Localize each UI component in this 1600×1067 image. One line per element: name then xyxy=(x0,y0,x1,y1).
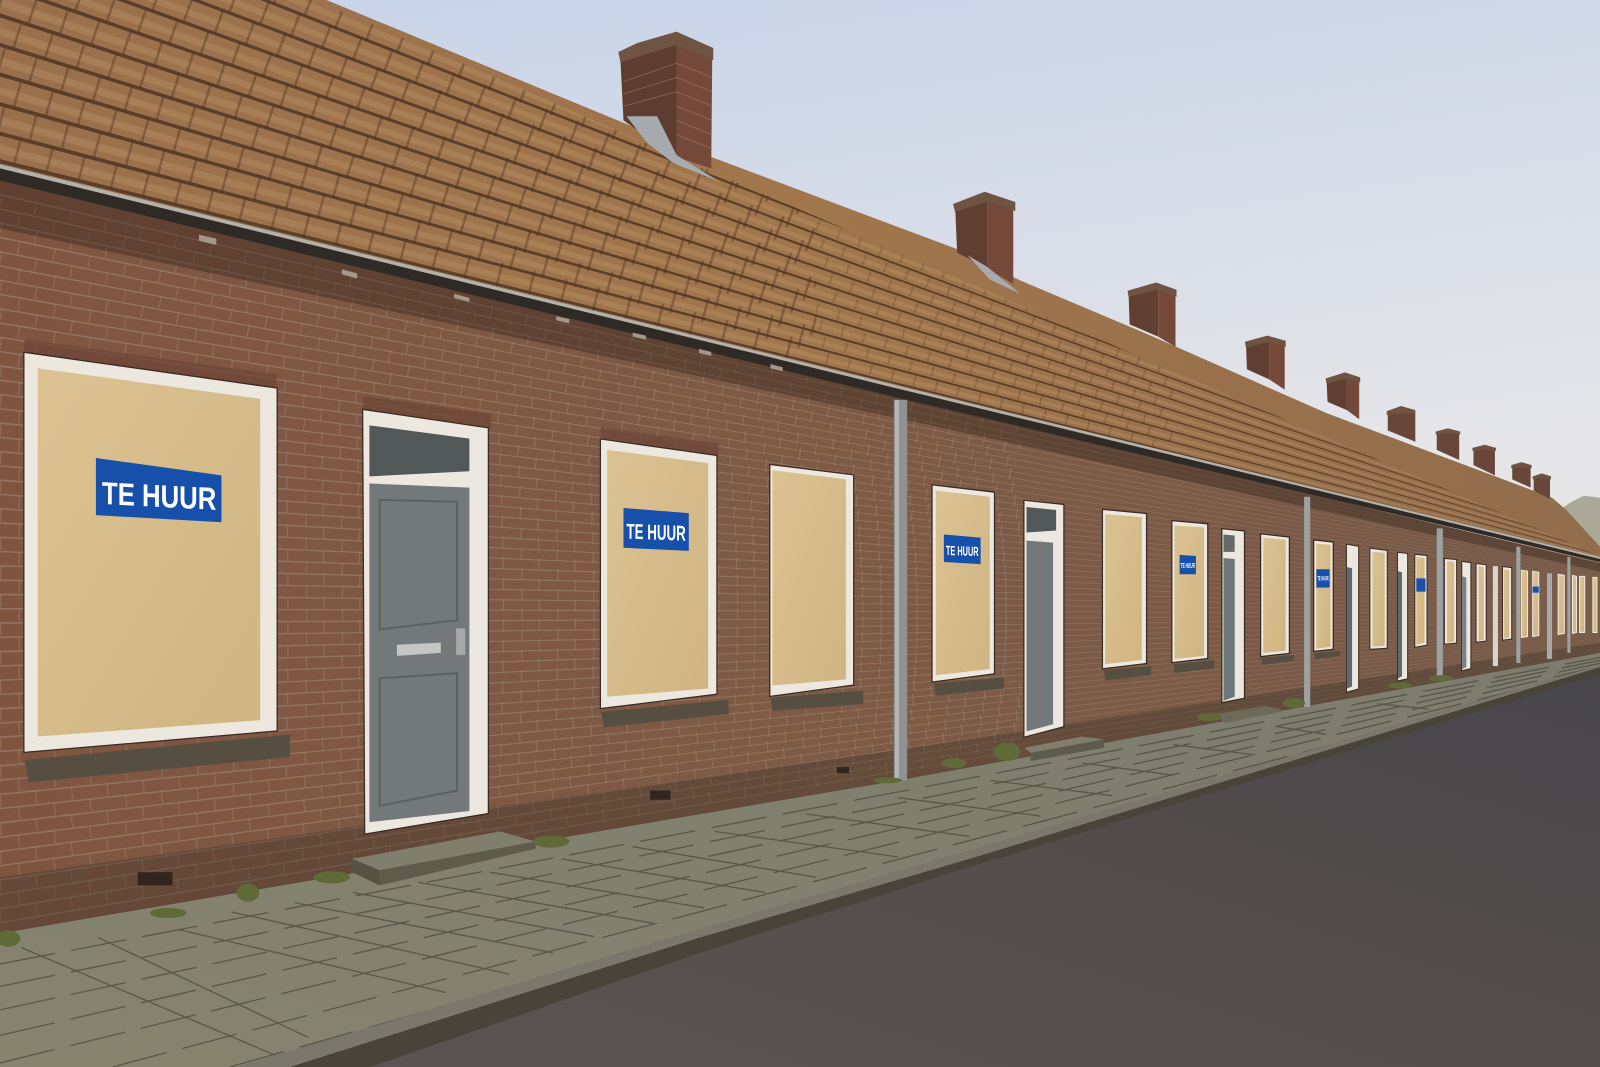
grass tufts xyxy=(0,675,1453,947)
roof xyxy=(0,0,1600,614)
doorstep xyxy=(1024,736,1104,761)
chimney 5 xyxy=(1326,372,1360,419)
distant tree xyxy=(1559,496,1600,551)
sign: TE HUUR: TE HUUR xyxy=(627,520,686,546)
sign: TE HUUR: TE HUUR xyxy=(946,543,979,559)
downpipe 1 xyxy=(894,400,907,780)
chimney 8 xyxy=(1472,445,1496,475)
window 2 with sign xyxy=(601,427,729,727)
chimney 3 xyxy=(1128,283,1177,347)
chimney 2 xyxy=(953,192,1020,294)
sign: TE HUUR xyxy=(96,458,221,522)
door 2 xyxy=(1024,501,1104,761)
window 4 with sign xyxy=(933,486,1004,696)
curb xyxy=(237,665,1600,1067)
downpipe 2 xyxy=(1304,497,1310,707)
brick wall xyxy=(0,175,1600,933)
chimney 10 xyxy=(1533,473,1551,499)
gutter xyxy=(0,164,1600,562)
chimney 4 xyxy=(1245,336,1286,390)
chimney 9 xyxy=(1511,462,1532,488)
sign: TE HUUR xyxy=(944,535,981,564)
chimneys xyxy=(618,32,1551,499)
window 5 xyxy=(1103,510,1151,680)
sign: TE HUUR xyxy=(623,508,689,551)
rafter tails xyxy=(199,235,783,371)
door 3 xyxy=(1216,529,1281,723)
chimney 7 xyxy=(1436,428,1460,460)
sky xyxy=(0,0,1600,571)
sidewalk xyxy=(0,614,1600,1067)
window 1 with sign xyxy=(24,340,290,782)
window 6 with sign xyxy=(1172,521,1214,673)
window 3 xyxy=(770,465,863,711)
sign: TE HUUR xyxy=(1180,555,1196,574)
window 8 with sign: TE HUUR xyxy=(1317,575,1329,582)
far doors, windows and pipes xyxy=(1347,528,1597,692)
door 1 xyxy=(352,396,536,885)
wall vents xyxy=(138,767,849,885)
chimney 1 xyxy=(618,32,719,182)
road xyxy=(290,668,1600,1067)
sill xyxy=(24,734,290,782)
window 6 with sign: TE HUUR xyxy=(1181,562,1195,570)
window 7 xyxy=(1261,535,1294,665)
sign: TE HUUR: TE HUUR xyxy=(102,475,216,517)
window 8 with sign xyxy=(1314,541,1340,659)
chimney 6 xyxy=(1387,406,1415,442)
doorstep xyxy=(352,831,536,885)
